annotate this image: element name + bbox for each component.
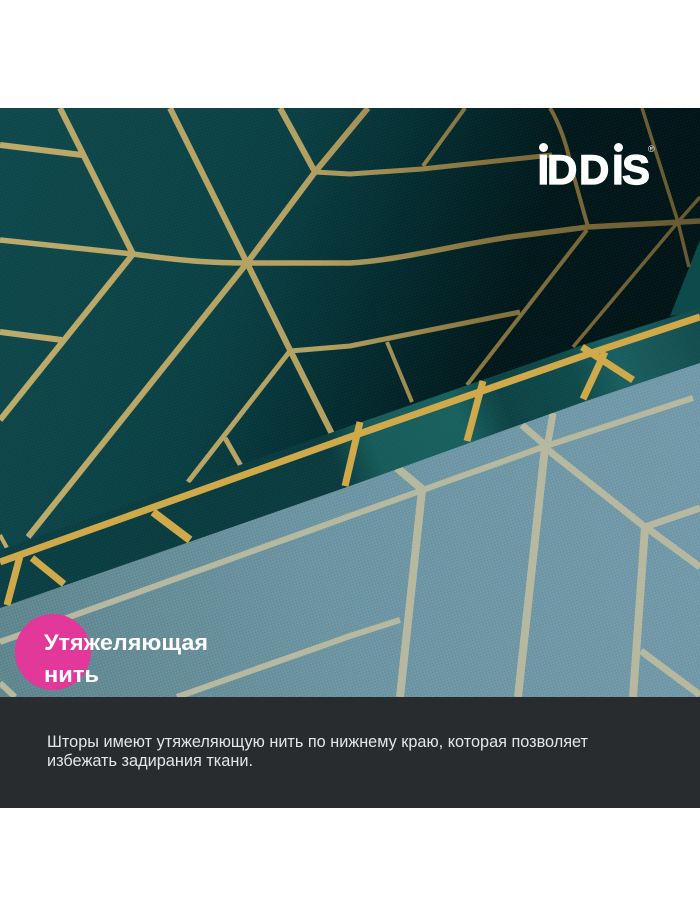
logo: IDDIS: ® [648, 144, 655, 154]
photo: curtain fabric [0, 108, 700, 697]
badge: pink circle [15, 614, 91, 690]
infographic canvas [0, 108, 700, 808]
light curtain panel [0, 362, 700, 697]
heading: weighting thread: Утяжеляющая [44, 630, 208, 655]
caption text: избежать задирания ткани. [47, 752, 253, 770]
hem fold [0, 308, 700, 608]
logo: IDDIS: IDDIS [538, 146, 650, 193]
caption text [47, 733, 588, 770]
heading second line: нить [44, 662, 99, 687]
caption band [0, 697, 700, 808]
gold stripes on hem [0, 317, 700, 605]
gold geometric pattern on dark fabric [0, 108, 700, 550]
caption text: Шторы имеют утяжеляющую нить по нижнему краю, которая позволяет [47, 733, 588, 751]
beige pattern on light fabric [0, 398, 700, 697]
dark curtain panel [0, 108, 700, 550]
